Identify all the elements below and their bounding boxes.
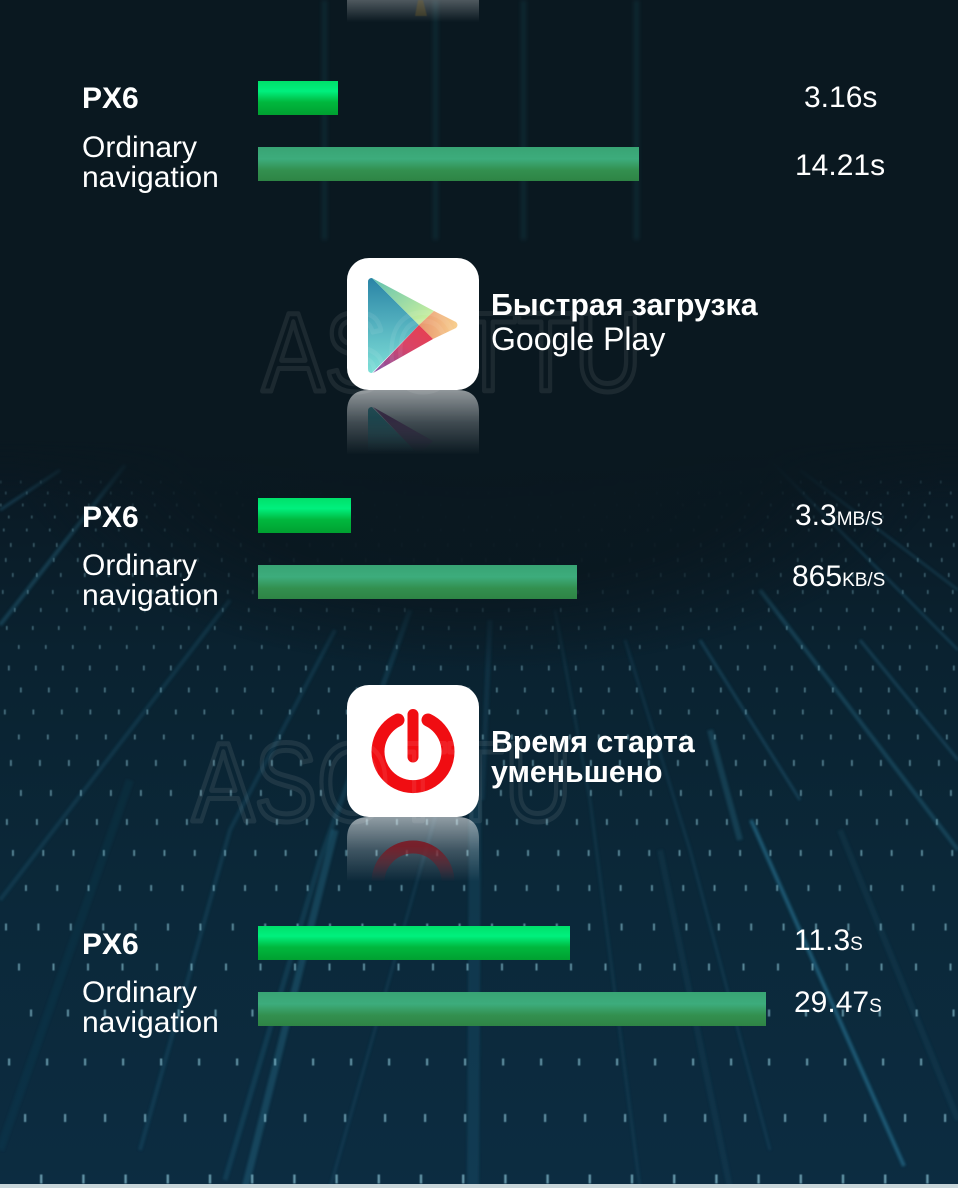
heading: fast download: Google Play	[491, 321, 665, 357]
value: 3.3 MB/S: 3.3MB/S	[795, 499, 883, 532]
bar: Ordinary navigation	[258, 992, 766, 1026]
icon reflection: Google Play	[347, 390, 479, 450]
panel: second comparison	[82, 498, 885, 612]
value: 29.47 S: 29.47S	[794, 986, 882, 1019]
value: 3.16s: 3.16s	[804, 81, 877, 114]
heading: startup time reduced: уменьшено	[491, 756, 663, 789]
bar: Ordinary navigation	[258, 565, 577, 599]
label: PX6: PX6	[82, 501, 139, 534]
value: 865 KB/S: 865KB/S	[792, 560, 885, 593]
value: 11.3 S: 11.3S	[794, 924, 863, 957]
bar: Ordinary navigation	[258, 147, 639, 181]
heading: startup time reduced: Время старта	[491, 726, 696, 759]
label: PX6: PX6	[82, 928, 139, 961]
panel: third comparison	[82, 924, 882, 1039]
label: PX6: PX6	[82, 82, 139, 115]
icon: power	[347, 685, 479, 817]
heading: fast download: Быстрая загрузка	[491, 289, 759, 322]
watermark: lower: ASOTTU	[192, 720, 572, 845]
heading: startup time reduced	[491, 726, 696, 789]
bar: PX6	[258, 926, 570, 960]
bar: PX6	[258, 81, 338, 115]
icon reflection: power	[347, 817, 479, 882]
value: 14.21s: 14.21s	[795, 149, 885, 182]
watermark: upper: ASOTTU	[262, 290, 642, 415]
label: Ordinary navigation: Ordinary	[82, 549, 197, 582]
panel: first comparison	[82, 81, 885, 194]
label: Ordinary navigation: navigation	[82, 1006, 219, 1039]
label: Ordinary navigation: Ordinary	[82, 976, 197, 1009]
label: Ordinary navigation: Ordinary	[82, 131, 197, 164]
reflection of the previous icon at top	[347, 0, 479, 22]
heading: fast download	[491, 289, 759, 357]
label: Ordinary navigation: navigation	[82, 579, 219, 612]
icon: Google Play	[347, 258, 479, 390]
bar: PX6	[258, 498, 351, 533]
label: Ordinary navigation: navigation	[82, 161, 219, 194]
